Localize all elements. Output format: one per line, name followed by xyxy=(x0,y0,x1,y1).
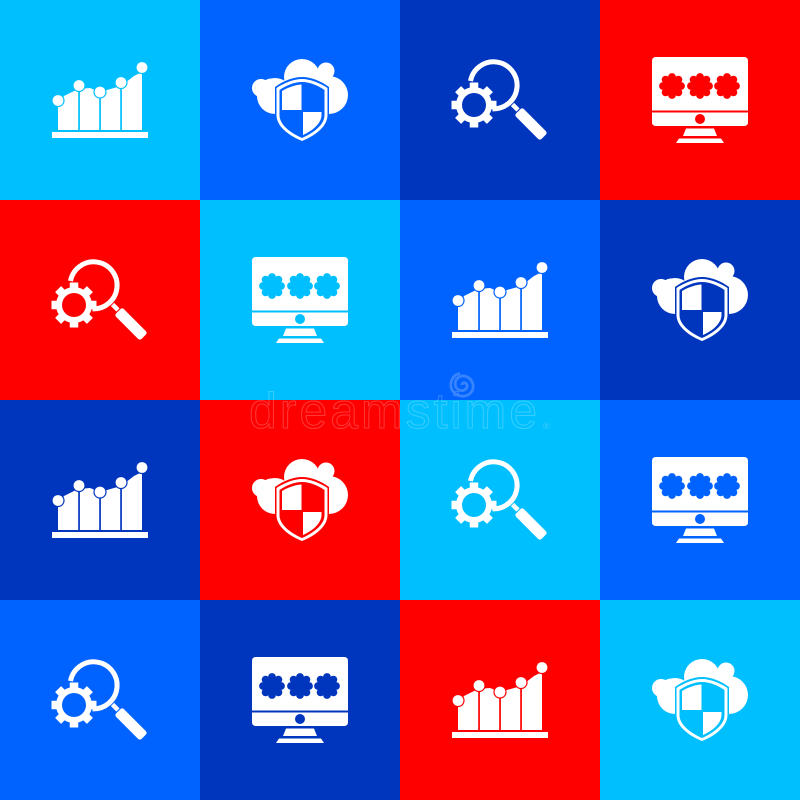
icon: magnifier with gear xyxy=(52,662,148,741)
tile: gear search on light blue xyxy=(400,400,600,600)
icon: cloud shield xyxy=(652,259,748,343)
icon: cloud shield xyxy=(252,459,348,543)
tile: gear search on blue xyxy=(0,600,200,800)
icon: monitor password xyxy=(652,57,748,143)
tile: chart on light blue xyxy=(0,0,200,200)
watermark spiral xyxy=(451,374,473,396)
tile: cloud shield on dark blue xyxy=(600,200,800,400)
watermark text: dreamstime xyxy=(249,383,537,439)
tile: monitor on red xyxy=(600,0,800,200)
icon: area chart xyxy=(451,661,549,738)
tile: gear search on red xyxy=(0,200,200,400)
icon: monitor password xyxy=(652,457,748,543)
icon: cloud shield xyxy=(252,59,348,143)
tile: monitor on blue xyxy=(600,400,800,600)
tile: monitor on light blue xyxy=(200,200,400,400)
tile: cloud shield on light blue xyxy=(600,600,800,800)
tile: chart on blue xyxy=(400,200,600,400)
icon: monitor password xyxy=(252,657,348,743)
icon: area chart xyxy=(51,461,149,538)
icon: cloud shield xyxy=(652,659,748,743)
tile: monitor on dark blue xyxy=(200,600,400,800)
icon: area chart xyxy=(51,61,149,138)
tile: chart on red xyxy=(400,600,600,800)
icon: magnifier with gear xyxy=(452,62,548,141)
icon: area chart xyxy=(451,261,549,338)
icon: magnifier with gear xyxy=(52,262,148,341)
tile: cloud shield on red xyxy=(200,400,400,600)
watermark registered mark: ® xyxy=(543,421,550,431)
watermark xyxy=(249,374,550,439)
tile: cloud shield on blue xyxy=(200,0,400,200)
tile: chart on dark blue xyxy=(0,400,200,600)
icon: monitor password xyxy=(252,257,348,343)
tile: gear search on dark blue xyxy=(400,0,600,200)
icon: magnifier with gear xyxy=(452,462,548,541)
